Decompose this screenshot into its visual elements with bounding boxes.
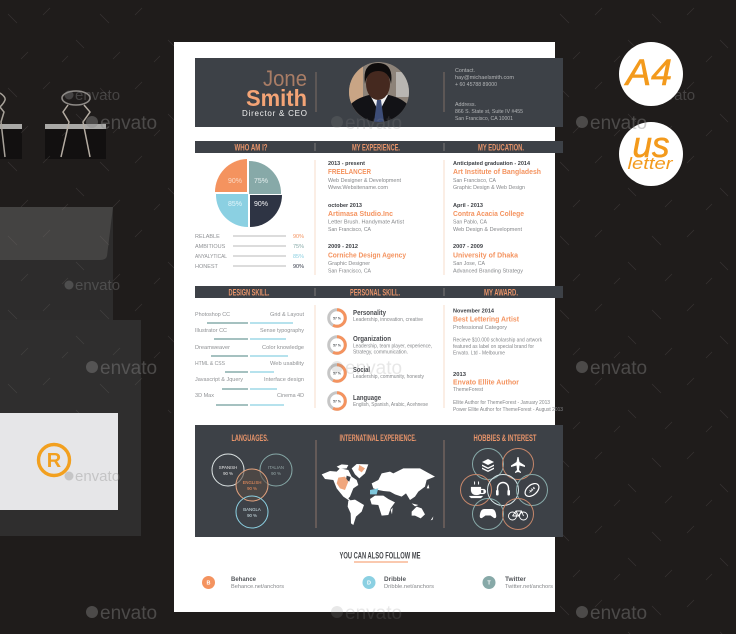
- panel: education: Anticipated graduation - 2014: [453, 161, 531, 167]
- panel: experience: Graphic Designer: [328, 261, 370, 267]
- panel: personal skill: [329, 308, 432, 409]
- panel: award: ThemeForest: [453, 387, 483, 393]
- envato watermarks: envato: [590, 358, 647, 379]
- scratch overlay on dark areas: [0, 0, 174, 413]
- dark panel: languages, experience map, hobbies: [195, 425, 563, 537]
- panel: award: Recieve $10.000 scholarship and artwork: [453, 338, 542, 344]
- social: twitter: [482, 576, 553, 590]
- faint watermark behind A4 badge: envato: [650, 87, 695, 104]
- panel: award: featured as label on special brand for: [453, 344, 534, 350]
- panel: experience: Web Designer & Development: [328, 178, 401, 184]
- envato watermarks: envato: [100, 358, 157, 379]
- trait list: [195, 234, 304, 270]
- panel: award: Best Lettering Artist: [453, 316, 520, 324]
- panel: experience: october 2013: [328, 203, 362, 209]
- badge: US letter: letter: [628, 154, 674, 173]
- pie chart: 90%: [254, 201, 268, 208]
- icon: registered logo: R: [47, 450, 62, 472]
- panel: design skill: 3D Max: [195, 393, 214, 399]
- panel: design skill: Color knowledge: [262, 345, 304, 351]
- section bar: design skill, personal skill, award: DESIGN SKILL.: [228, 288, 270, 298]
- stationery: envelopes and card: [0, 207, 141, 536]
- section bar: who am i, experience, education: WHO AM I?: [234, 143, 268, 153]
- languages venn diagram: [212, 454, 292, 528]
- envato watermarks: envato: [100, 113, 157, 134]
- panel: personal skill: Leadership, innovation, creative: [353, 317, 423, 323]
- panel: education: April - 2013: [453, 203, 483, 209]
- contact details: hay@michaelsmith.com: [455, 75, 515, 81]
- social: dribbble: Dribble: [384, 577, 407, 583]
- social: behance: B: [207, 580, 211, 586]
- panel: personal skill: Organization: [353, 334, 391, 343]
- panel: education: Graphic Design & Web Design: [453, 185, 525, 191]
- section bar: design skill, personal skill, award: PERSONAL SKILL.: [350, 288, 400, 298]
- envato watermarks: envato: [345, 113, 402, 134]
- languages venn diagram: 90 %: [271, 471, 281, 476]
- badge: A4: A4: [624, 52, 672, 93]
- white resume sheet: [174, 42, 555, 612]
- panel: who am i: [195, 159, 304, 270]
- icon: headphones: [496, 482, 510, 496]
- trait list: 75%: [293, 244, 304, 250]
- panel: award: November 2014: [453, 308, 495, 314]
- panel: design skill: Web usability: [270, 361, 304, 367]
- panel: personal skill: Leadership, community, honesty: [353, 374, 424, 380]
- panel: education: San Pablo, CA: [453, 220, 487, 226]
- social: twitter: T: [487, 580, 491, 586]
- panel: education: San Jose, CA: [453, 261, 485, 267]
- badge: US letter: us: [632, 124, 670, 165]
- icon: game controller: [480, 509, 496, 518]
- section bar: design skill, personal skill, award: [195, 286, 563, 298]
- panel: experience: [328, 161, 406, 274]
- icon: bicycle: [508, 511, 528, 520]
- contact details: + 60 45788 89000: [455, 82, 497, 88]
- panel: experience: Letter Brush. Handymate Artist: [328, 220, 405, 226]
- languages venn diagram: ENGLISH: [243, 480, 261, 485]
- languages venn diagram: 90 %: [247, 486, 257, 491]
- section bar: who am i, experience, education: MY EXPERIENCE.: [352, 143, 400, 153]
- section bar: who am i, experience, education: MY EDUCATION.: [478, 143, 524, 153]
- panel: personal skill: Strategy, communication.: [353, 350, 408, 356]
- skill bars: [207, 323, 293, 405]
- badge: US letter: [619, 122, 683, 186]
- contact details: 866 S. State st, Suite IV #455: [455, 109, 523, 115]
- panel: award: [453, 308, 563, 413]
- panel: award: 2013: [453, 372, 466, 378]
- trait list: 90%: [293, 264, 304, 270]
- panel: personal skill: Leadership, team player, experience,: [353, 343, 432, 349]
- languages venn diagram: BANGLA: [243, 507, 261, 512]
- skill rings: [329, 310, 345, 409]
- footer heading: YOU CAN ALSO FOLLOW ME: [340, 550, 420, 560]
- panel: award: Ellite Author for ThemeForest - January 2013: [453, 400, 550, 406]
- panel: award: Envato Ellite Author: [453, 380, 519, 386]
- envato watermarks: envato: [75, 87, 120, 104]
- icon: airplane: [511, 457, 525, 473]
- pie chart: 75%: [254, 178, 268, 185]
- panel: education: Advanced Branding Strategy: [453, 268, 523, 274]
- trait list: AMBITIOUS: [195, 244, 226, 250]
- dark panel: languages, experience map, hobbies: HOBBIES & INTEREST: [474, 433, 537, 443]
- languages venn diagram: 90 %: [223, 471, 233, 476]
- section bar: who am i, experience, education: [195, 141, 563, 153]
- panel: award: Power Ellite Author for ThemeForest - August 2013: [453, 407, 563, 413]
- badge: A4: [619, 42, 683, 106]
- contact details: [455, 68, 523, 122]
- social: dribbble: D: [367, 580, 371, 586]
- header band: [195, 58, 563, 127]
- panel: personal skill: Personality: [353, 308, 387, 317]
- panel: personal skill: English, Spanish, Arabic, Acehnese: [353, 402, 428, 408]
- social: dribbble: [362, 576, 434, 590]
- front envelope: [0, 320, 141, 536]
- contact details: Contact.: [455, 68, 475, 74]
- white card: [0, 413, 118, 510]
- languages venn diagram: 90 %: [247, 513, 257, 518]
- panel: experience: 2013 - present: [328, 161, 365, 167]
- trait list: ANYALYTICAL: [195, 254, 227, 260]
- first name: Jone: [263, 66, 307, 91]
- panel: design skill: Sense typography: [260, 328, 304, 334]
- icon: layers: [482, 459, 494, 472]
- panel: personal skill: 57 %: [333, 343, 341, 347]
- social: behance: Behance.net/anchors: [231, 584, 284, 590]
- social: behance: Behance: [231, 577, 257, 583]
- languages venn diagram: SPANISH: [219, 465, 237, 470]
- languages venn diagram: ITALIAN: [268, 465, 284, 470]
- panel: education: 2007 - 2009: [453, 244, 483, 250]
- contact details: San Francisco, CA 10001: [455, 116, 513, 122]
- panel: design skill: Illustrator CC: [195, 328, 227, 334]
- dark panel: languages, experience map, hobbies: INTERNATINAL EXPERIENCE.: [340, 433, 416, 443]
- icon: registered logo: [38, 444, 70, 476]
- social: twitter: Twitter.net/anchors: [505, 584, 553, 590]
- panel: design skill: Cinema 4D: [277, 393, 304, 399]
- panel: design skill: [195, 312, 304, 405]
- panel: education: Web Design & Development: [453, 227, 523, 233]
- envato watermarks: envato: [345, 603, 402, 624]
- panel: design skill: Interface design: [264, 377, 304, 383]
- panel: award: Envato. Ltd - Melbourne: [453, 350, 505, 356]
- panel: personal skill: 57 %: [333, 399, 341, 403]
- back envelope: [0, 207, 113, 320]
- panel: education: [453, 161, 541, 274]
- binder clip right: [45, 91, 106, 159]
- social: behance: [202, 576, 284, 590]
- panel: experience: San Francisco, CA: [328, 227, 371, 233]
- social: twitter: Twitter: [505, 577, 527, 583]
- panel: education: San Francisco, CA: [453, 178, 496, 184]
- icon: coffee cup: [469, 481, 486, 498]
- panel: design skill: Photoshop CC: [195, 312, 230, 318]
- panel: design skill: Grid & Layout: [270, 312, 304, 318]
- contact details: Address.: [455, 102, 476, 108]
- panel: personal skill: Social: [353, 365, 370, 374]
- envato watermarks: envato: [590, 603, 647, 624]
- panel: experience: Artimasa Studio.Inc: [328, 211, 393, 218]
- envato watermarks: envato: [75, 468, 120, 485]
- world map: [322, 464, 435, 525]
- panel: experience: San Francisco, CA: [328, 268, 371, 274]
- trait list: RELABLE: [195, 234, 220, 240]
- panel: award: Professional Category: [453, 325, 507, 331]
- social: dribbble: Dribble.net/anchors: [384, 584, 434, 590]
- icon: football: [523, 481, 541, 499]
- panel: experience: 2009 - 2012: [328, 244, 358, 250]
- trait list: 85%: [293, 254, 304, 260]
- hobby circles: [460, 448, 548, 530]
- binder clips: [0, 91, 106, 159]
- panel: design skill: Javascript & Jquery: [195, 377, 243, 383]
- job title: Director & CEO: [242, 109, 307, 118]
- envato watermarks: envato: [100, 603, 157, 624]
- panel: experience: Www.Websitename.com: [328, 185, 389, 191]
- footer heading: [340, 550, 420, 562]
- trait list: 90%: [293, 234, 304, 240]
- panel: education: Art Institute of Bangladesh: [453, 169, 541, 176]
- binder clip left: [0, 93, 22, 159]
- pie chart: 85%: [228, 201, 242, 208]
- panel: personal skill: 57 %: [333, 316, 341, 320]
- portrait photo: [349, 62, 409, 122]
- panel: education: University of Dhaka: [453, 252, 518, 260]
- pie chart: [215, 159, 282, 227]
- dark panel: languages, experience map, hobbies: LANGUAGES.: [232, 433, 268, 443]
- panel: education: Contra Acacia College: [453, 211, 524, 218]
- envato watermarks: [64, 87, 647, 624]
- panel: experience: Corniche Design Agency: [328, 252, 406, 260]
- panel: personal skill: 57 %: [333, 371, 341, 375]
- last name: Smith: [246, 85, 307, 111]
- section bar: design skill, personal skill, award: MY AWARD.: [484, 288, 518, 298]
- panel: design skill: Dreamweaver: [195, 345, 230, 351]
- envato watermarks: envato: [345, 358, 402, 379]
- envato watermarks: envato: [590, 113, 647, 134]
- panel: design skill: HTML & CSS: [195, 361, 225, 367]
- envelope flap: [0, 207, 113, 260]
- trait list: HONEST: [195, 264, 219, 270]
- panel: experience: FREELANCER: [328, 169, 371, 176]
- pie chart: 90%: [228, 178, 242, 185]
- panel: personal skill: Language: [353, 393, 381, 402]
- envato watermarks: envato: [75, 277, 120, 294]
